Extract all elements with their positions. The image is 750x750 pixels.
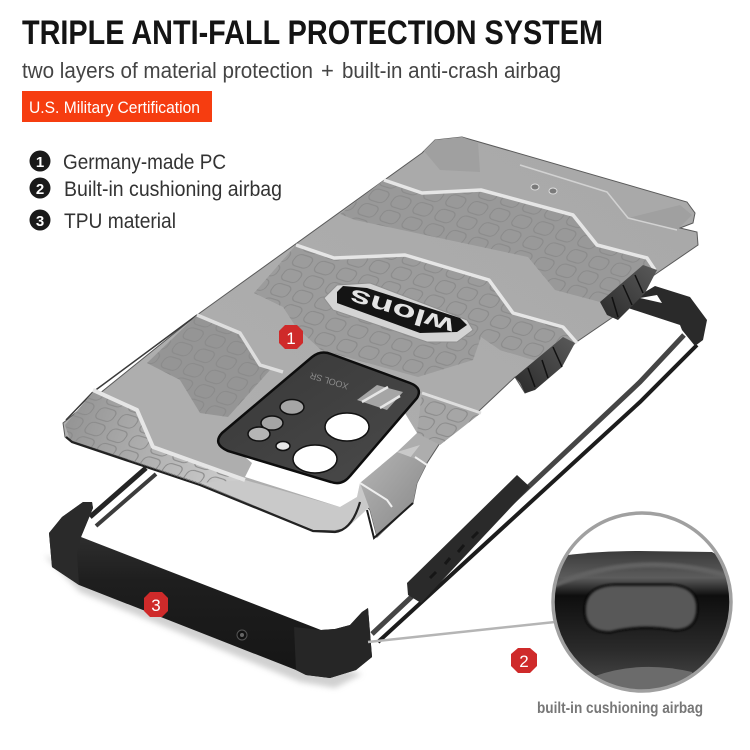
- lower plate: [596, 666, 692, 690]
- marker 3: [144, 592, 168, 617]
- marker 3: 3: [151, 596, 161, 615]
- side clip lower: [515, 337, 575, 393]
- feature 1: 1: [36, 154, 44, 171]
- side buttons: [407, 475, 530, 603]
- marker 2: 2: [519, 652, 529, 671]
- transparent window: [225, 400, 417, 507]
- charging hole: [237, 630, 247, 640]
- detail lens: airbag: [550, 512, 735, 700]
- certification badge: U.S. Military Certification: [29, 98, 200, 117]
- bottom tab: [360, 452, 427, 538]
- feature 3: [30, 210, 176, 233]
- certification badge: [22, 91, 212, 122]
- white ridges: [93, 165, 677, 480]
- airbag pad: [585, 585, 697, 632]
- feature 2: Built-in cushioning airbag: [64, 178, 282, 201]
- leader line: [368, 622, 555, 642]
- left rail: [90, 468, 156, 526]
- honeycomb zones: [65, 137, 692, 483]
- top right corner: [628, 286, 707, 346]
- right corner facet: [294, 608, 372, 678]
- marker 1: [279, 325, 303, 349]
- right rail: [372, 335, 697, 642]
- bumper frame: [44, 286, 707, 688]
- subtitle: two layers of material protection: [22, 58, 313, 83]
- frame shadow: [44, 555, 362, 688]
- marker 1: 1: [286, 329, 296, 348]
- case body: [63, 137, 698, 537]
- feature list: [30, 150, 282, 233]
- logo plate: [324, 283, 473, 342]
- subtitle: [22, 58, 561, 83]
- lenses: [280, 400, 304, 414]
- detail caption: built-in cushioning airbag: [537, 700, 703, 717]
- speaker dots: [531, 184, 557, 194]
- subtitle: built-in anti-crash airbag: [342, 58, 561, 83]
- corner window: [640, 295, 662, 303]
- logo plate: wlons: [346, 284, 458, 341]
- feature 2: 2: [36, 181, 44, 198]
- brand text: XOOL SR: [308, 370, 350, 391]
- dark bottom edge: [66, 437, 360, 532]
- bottom bar and corners: [49, 502, 372, 678]
- phone case: [63, 137, 698, 538]
- subtitle: +: [321, 58, 334, 83]
- dark outer edge: [66, 315, 197, 420]
- title: TRIPLE ANTI-FALL PROTECTION SYSTEM: [22, 14, 603, 52]
- upper highlight arc: [552, 565, 735, 586]
- flash window: [357, 385, 403, 410]
- marker 2: [511, 648, 537, 673]
- side clip upper: [600, 265, 657, 320]
- clear lower rim: [120, 445, 420, 530]
- rubber body: [554, 551, 730, 676]
- feature 3: 3: [36, 213, 44, 230]
- feature 1: Germany-made PC: [63, 151, 226, 174]
- feature 3: TPU material: [64, 210, 176, 233]
- left corner facet: [49, 502, 93, 585]
- camera module: [218, 353, 419, 483]
